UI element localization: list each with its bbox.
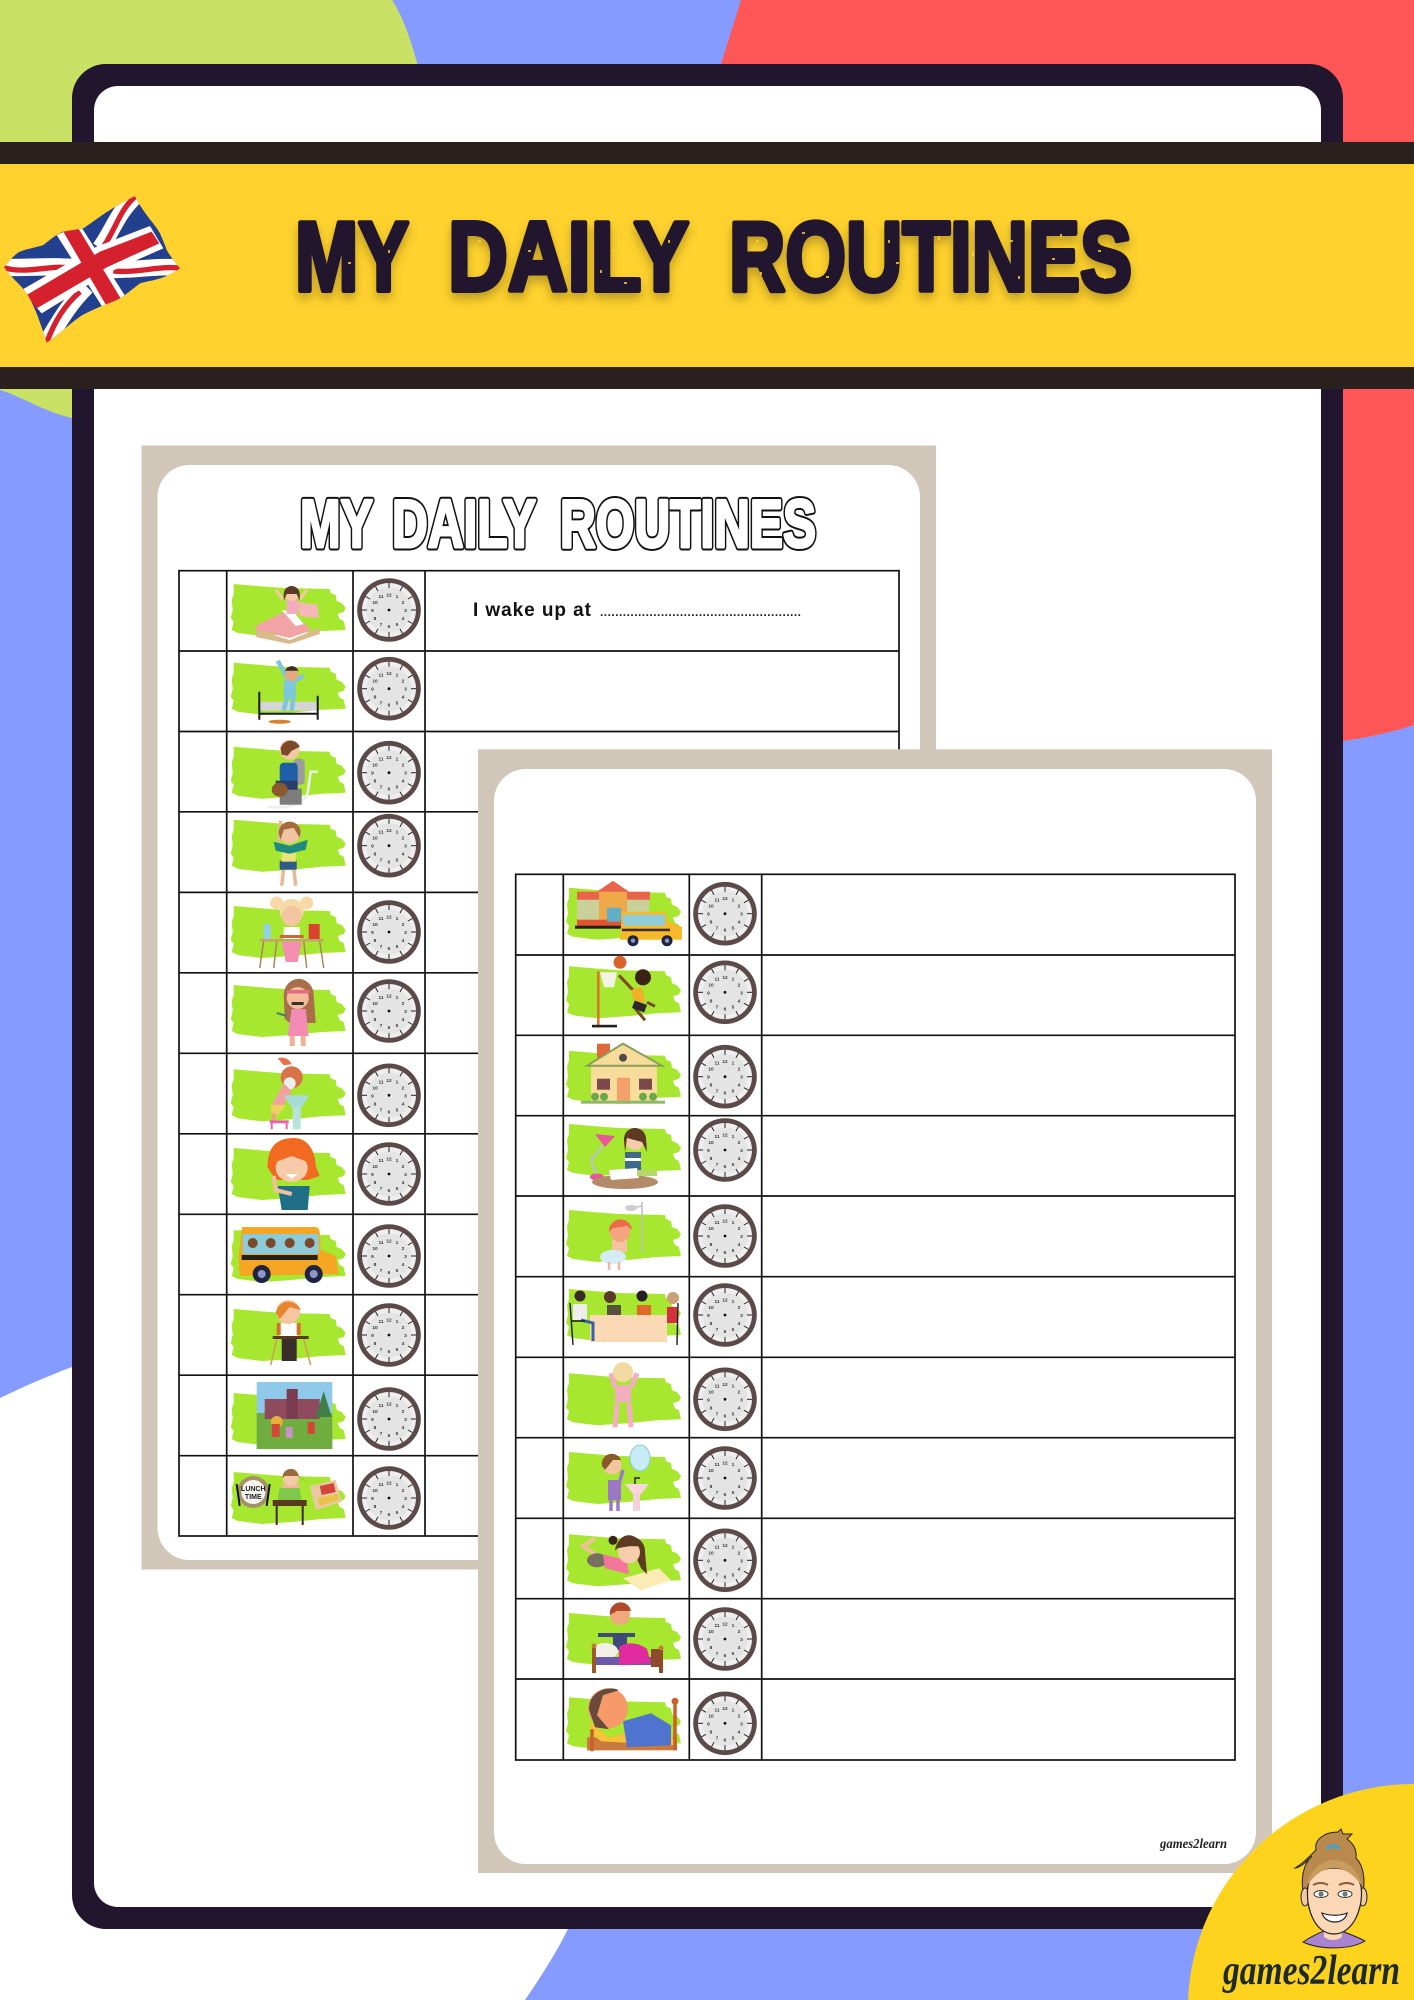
heading: outlined worksheet title: MY (300, 486, 373, 562)
row 4: doing homework (566, 1124, 681, 1189)
row 5: having a shower (566, 1202, 681, 1270)
heading: outlined worksheet title: ROUTINES (560, 486, 816, 562)
row 11: sleeping (566, 1688, 681, 1751)
icon: avatar (1295, 1829, 1367, 1948)
clocks: page 2 (693, 882, 757, 1755)
small credit: games2learn (1159, 1837, 1227, 1852)
row 10: going to bed, yawning (566, 1602, 681, 1673)
row 1: school and bus (566, 881, 682, 946)
row 6: brushing teeth (231, 979, 346, 1046)
row 10: at school desk (231, 1300, 346, 1365)
panel: worksheet page 2 (478, 749, 1272, 1873)
row 3: toilet (231, 740, 346, 807)
sentence: wake up: I wake up at (473, 600, 592, 621)
row 5: having breakfast (231, 896, 346, 968)
row 7: washing face (231, 1058, 346, 1129)
row 11: school playground photo (231, 1382, 346, 1449)
title (295, 202, 1132, 312)
table grid: page 1 (179, 571, 899, 1536)
clocks: page 1 (357, 578, 421, 1530)
panel: worksheet page 1 (142, 446, 936, 1570)
heading: outlined worksheet title: DAILY (392, 486, 536, 562)
row 12: lunch time: LUNCH (241, 1486, 266, 1493)
title: MY (295, 202, 409, 312)
row 3: house (566, 1044, 681, 1104)
row 12: lunch time: TIME (245, 1494, 262, 1501)
row 8: combing hair (231, 1138, 346, 1210)
row 4: getting dressed (231, 820, 346, 886)
badge: brand corner (1188, 1784, 1414, 2000)
answer dots: ..................................................... (600, 605, 801, 619)
row 2: basketball (566, 956, 681, 1027)
heading: outlined worksheet title: ROUTINES (560, 486, 816, 562)
row 2: getting up (231, 661, 346, 724)
row 12: lunch time (231, 1469, 346, 1525)
title: DAILY (448, 202, 689, 312)
row 8: brushing teeth at sink (566, 1445, 681, 1511)
heading: outlined worksheet title: MY (300, 486, 373, 562)
row 1: waking up (231, 584, 346, 644)
heading: outlined worksheet title (300, 486, 816, 562)
row 9: reading a book (566, 1534, 681, 1590)
banner (0, 142, 1414, 389)
heading: outlined worksheet title: DAILY (392, 486, 536, 562)
row 9: school bus (231, 1227, 346, 1283)
row 6: family dinner (566, 1289, 681, 1345)
table grid: page 2 (516, 874, 1235, 1760)
icon: UK flag (4, 196, 180, 342)
title: ROUTINES (729, 202, 1132, 312)
row 7: putting on pyjamas (566, 1362, 681, 1427)
